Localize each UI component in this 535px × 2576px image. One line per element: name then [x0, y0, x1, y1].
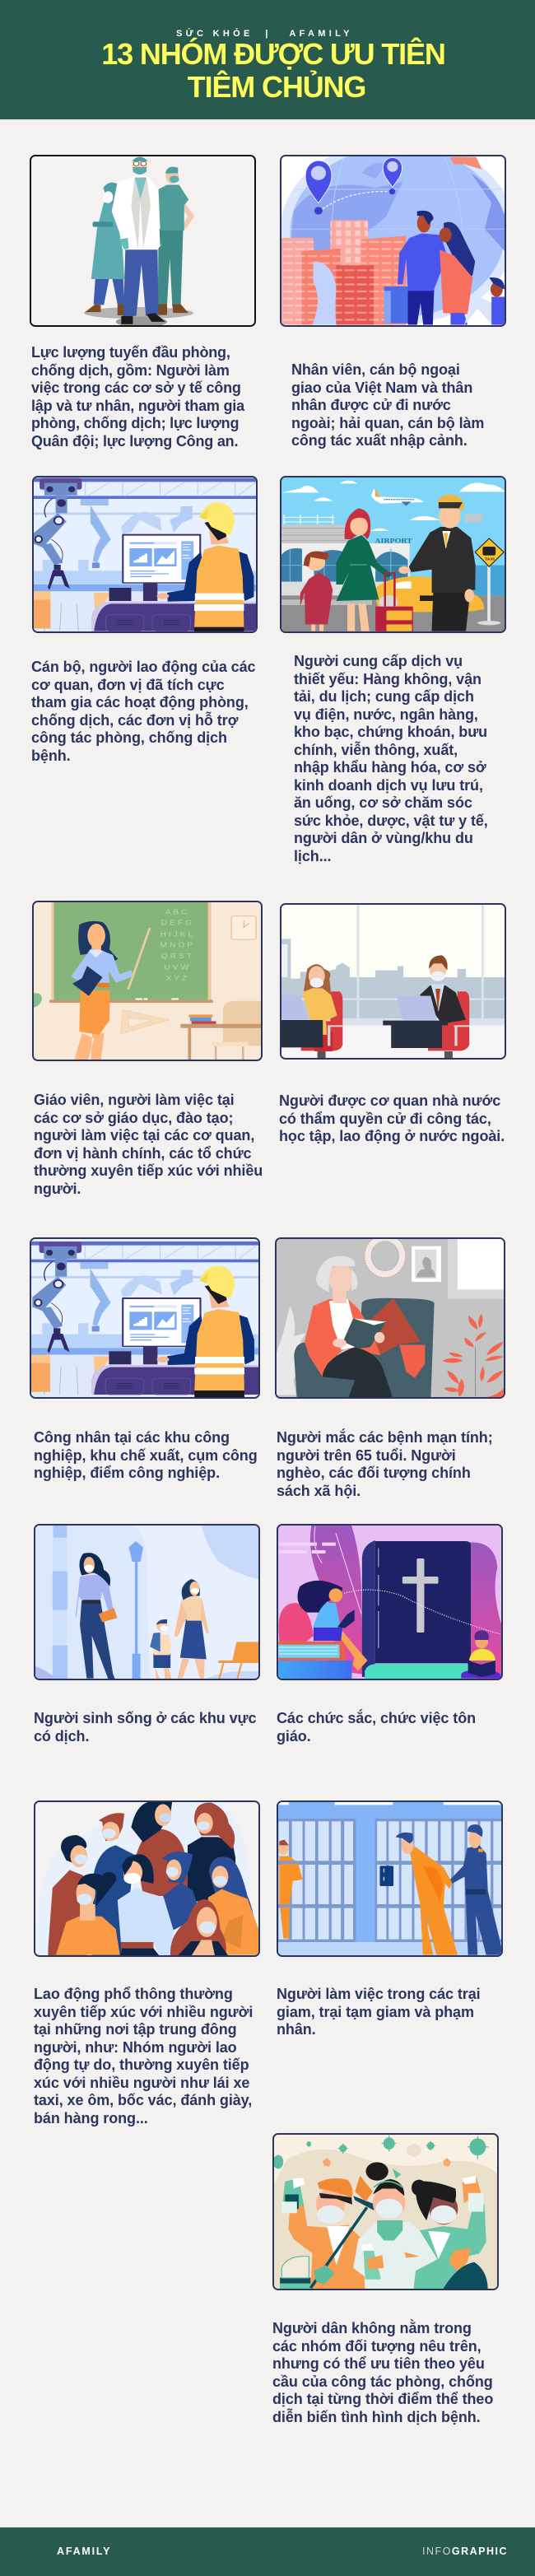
text: officials sent abroad: có thẩm quyền cử đi công tác, — [279, 1110, 491, 1126]
icon: woman holding child's hand — [174, 1579, 209, 1679]
text: essential services: chính, viễn thông, xuất, — [294, 741, 458, 757]
icon: street lamp — [128, 1541, 143, 1679]
text: remaining citizens: nhưng có thể ưu tiên theo yêu — [272, 2355, 485, 2372]
text: chronic illness and elderly: Người mắc các bệnh mạn tính; — [277, 1429, 493, 1446]
panel 3: factory control room — [32, 476, 258, 633]
icon: handcuffed prisoner — [396, 1833, 458, 1955]
icon: coral plant — [442, 1314, 504, 1397]
text: essential services: ăn uống, cơ sở chăm sóc — [294, 794, 472, 811]
icon: location pins — [305, 158, 402, 215]
icon: woman with laptop — [280, 964, 343, 1059]
text: teachers: người. — [34, 1181, 81, 1197]
text: labourers — [34, 1986, 253, 2126]
text: frontline forces: Lực lượng tuyến đầu phòng, — [31, 344, 230, 361]
icon: tall woman with bag — [76, 1553, 117, 1679]
icon: airplane — [371, 488, 424, 505]
icon: prisoner behind bars — [277, 1840, 303, 1939]
text: industrial workers — [34, 1429, 258, 1481]
text: essential services: tải, du lịch; cung cấp dịch — [294, 688, 474, 705]
text: prison staff — [277, 1986, 481, 2038]
title: TIÊM CHỦNG — [188, 70, 365, 104]
icon: red blanket — [370, 1298, 425, 1378]
text: remaining citizens: Người dân không nằm trong — [272, 2320, 472, 2336]
icon: airport building — [280, 515, 506, 633]
icon: cardboard boxes — [27, 591, 111, 628]
text: frontline forces: chống dịch, gồm: Người làm — [31, 362, 230, 379]
text: frontline forces: lập và tư nhân, người tham gia — [31, 397, 244, 413]
text: labourers: tại những nơi tập trung đông — [34, 2021, 237, 2038]
text: diplomats: giao của Việt Nam và thân — [291, 379, 472, 395]
icon: stacked books — [277, 1642, 351, 1679]
text: chronic illness and elderly: sách xã hội. — [277, 1482, 361, 1498]
panel 6: officers working abroad — [280, 903, 506, 1060]
icon: foreground robot arm — [33, 478, 81, 590]
text: remaining citizens: cầu của công tác phòng, chống — [272, 2373, 493, 2389]
icon: elderly woman with book — [305, 1256, 393, 1397]
icon: round mirror — [365, 1235, 406, 1278]
text: chronic illness and elderly: nghèo, các đối tượng chính — [277, 1465, 471, 1481]
text: essential services: kho bạc, chứng khoán, bưu — [294, 724, 487, 740]
text: outbreak areas — [34, 1710, 256, 1744]
icon: boy with backpack — [150, 1619, 171, 1679]
icon: yellow taxi — [374, 576, 484, 612]
icon: desktop monitor with charts — [122, 534, 201, 601]
icon: blackboard: H I J K L — [160, 929, 193, 938]
icon: bench — [218, 1642, 259, 1679]
text: state officers: chống dịch, các đơn vị hỗ trợ — [31, 711, 238, 728]
icon: teacher with pointer — [71, 921, 150, 1060]
panel 12: prison scene — [277, 1800, 503, 1957]
icon: bible with cross — [344, 1540, 501, 1679]
icon: right people in blue — [162, 1852, 259, 1955]
text: frontline forces: việc trong các cơ sở y tế công — [31, 380, 241, 396]
icon: blackboard: X Y Z — [166, 974, 187, 982]
text: state officers: cơ quan, đơn vị đã tích cực — [31, 677, 225, 693]
text: outbreak areas: Người sinh sống ở các khu vực — [34, 1710, 256, 1726]
text: outbreak areas: có dịch. — [34, 1727, 89, 1744]
header band — [0, 0, 535, 119]
icon: front woman with long hair — [170, 1899, 229, 1956]
icon: red suitcase — [375, 573, 413, 631]
icon: blackboard: D E F G — [161, 919, 192, 926]
icon: family with luggage — [384, 211, 505, 324]
text: teachers: đơn vị hành chính, các tổ chức — [34, 1144, 251, 1161]
text: essential services: thiết yếu: Hàng không, vận — [294, 670, 482, 687]
icon: globe — [280, 139, 515, 324]
text: essential services: sức khỏe, dược, vật tư y tế, — [294, 812, 488, 828]
title — [101, 37, 445, 104]
icon: bun woman in orange — [56, 1872, 120, 1955]
icon: armchair — [294, 1298, 435, 1398]
footer: publisher: AFAMILY — [57, 2546, 111, 2557]
text: chronic illness and elderly — [277, 1428, 493, 1498]
panel 7: factory workers — [30, 1237, 260, 1399]
text: industrial workers: nghiệp, khu chế xuất, cụm công — [34, 1447, 258, 1464]
icon: left nurse — [85, 183, 124, 315]
title: 13 NHÓM ĐƯỢC ƯU TIÊN — [101, 37, 445, 71]
text: frontline forces — [31, 344, 245, 450]
icon: airport building: AIRPORT — [374, 538, 412, 544]
icon: purple leaves — [278, 1524, 501, 1679]
icon: green suit worker with bin bag — [412, 2176, 488, 2290]
icon: clouds — [281, 481, 505, 531]
text: essential services: nhập khẩu hàng hóa, cơ sở — [294, 759, 486, 776]
text: state officers: bệnh. — [31, 748, 71, 764]
icon: blackboard: M N O P — [160, 941, 193, 948]
icon: woman in green coat — [336, 508, 393, 631]
icon: doctor in white coat — [112, 157, 165, 324]
text: industrial workers: Công nhân tại các khu công — [34, 1429, 230, 1446]
text: teachers — [34, 1092, 263, 1197]
text: officials sent abroad: học tập, lao động ở nước ngoài. — [279, 1128, 505, 1144]
panel 11: crowd with masks — [34, 1800, 260, 1957]
text: teachers: các cơ sở giáo dục, đào tạo; — [34, 1110, 233, 1126]
text: teachers: Giáo viên, người làm việc tại — [34, 1092, 235, 1108]
text: labourers: người, như: Nhóm người lao — [34, 2038, 237, 2055]
icon: cell bars — [277, 1819, 503, 1957]
icon: framed portrait — [412, 1246, 441, 1282]
icon: background shapes — [34, 1524, 260, 1679]
icon: back row people — [92, 1801, 235, 1956]
icon: guard in blue uniform — [450, 1824, 503, 1955]
icon: broom — [310, 2176, 375, 2288]
icon: ceiling lights — [278, 1802, 501, 1805]
panel 2: diplomats and family — [280, 155, 506, 327]
text: frontline forces: Quân đội; lực lượng Công an. — [31, 433, 238, 450]
icon: child with book — [461, 1630, 501, 1679]
icon: taxi driver — [398, 495, 482, 631]
icon: center woman in white — [118, 1854, 174, 1957]
text: chronic illness and elderly: người trên 65 tuổi. Người — [277, 1447, 456, 1464]
footer: infographic label: INFOGRAPHIC — [422, 2546, 508, 2557]
text: state officers — [31, 659, 255, 764]
icon: wall clock — [231, 916, 256, 939]
icon: taxi sign — [475, 538, 504, 625]
panel 5: teacher at blackboard — [32, 901, 263, 1061]
icon: orange worker with broom — [280, 2178, 365, 2290]
icon: blackboard: A B C — [165, 907, 188, 915]
panel 8: elderly woman reading — [275, 1237, 505, 1399]
text: state officers: tham gia các hoạt động phòng, — [31, 694, 249, 710]
icon: left man in red — [48, 1835, 87, 1956]
icon: worker in safety vest — [156, 502, 254, 634]
text: teachers: người làm việc tại các cơ quan, — [34, 1127, 254, 1144]
icon: virus particles — [273, 2136, 489, 2168]
text: essential services — [294, 653, 488, 864]
text: religious dignitaries: Các chức sắc, chức việc tôn — [277, 1710, 476, 1726]
panel 9: people in outbreak areas — [34, 1524, 260, 1680]
icon: woman reading — [297, 1581, 367, 1671]
icon: cell lock — [379, 1866, 393, 1886]
text: labourers: xuyên tiếp xúc với nhiều người — [34, 2004, 253, 2020]
panel 4: taxi and airport services — [280, 476, 506, 633]
text: essential services: kinh doanh dịch vụ lưu trú, — [294, 777, 483, 794]
text: labourers: xúc với nhiều người như lái xe — [34, 2075, 249, 2091]
icon: blackboard — [49, 901, 213, 1003]
text: officials sent abroad — [279, 1092, 505, 1144]
text: teachers: thường xuyên tiếp xúc với nhiều — [34, 1162, 263, 1179]
panel 13: sanitation workers and viruses — [272, 2133, 499, 2290]
text: remaining citizens — [272, 2319, 493, 2425]
text: prison staff: nhân. — [277, 2021, 316, 2038]
text: diplomats: ngoài; hải quan, cán bộ làm — [291, 415, 484, 431]
icon: desk chair and books — [180, 1001, 263, 1060]
text: diplomats: nhân được cử đi nước — [291, 397, 451, 413]
text: labourers: Lao động phổ thông thường — [34, 1986, 233, 2002]
eyebrow: section and publisher: SỨC KHỎE | AFAMILY — [176, 29, 353, 39]
icon: background robot arms — [81, 499, 193, 568]
footer band — [0, 2527, 535, 2576]
text: frontline forces: phòng, chống dịch; lực lượng — [31, 415, 239, 431]
icon: set square — [120, 1009, 170, 1034]
text: essential services: vụ điện, nước, ngân hàng, — [294, 706, 478, 723]
text: officials sent abroad: Người được cơ quan nhà nước — [279, 1092, 500, 1109]
icon: city buildings — [281, 220, 406, 324]
icon: white leaf plant — [276, 1306, 305, 1395]
text: labourers: taxi, xe ôm, bốc vác, đánh giày, — [34, 2092, 252, 2108]
text: diplomats: Nhân viên, cán bộ ngoại — [291, 361, 460, 378]
text: industrial workers: nghiệp, điểm công nghiệp. — [34, 1465, 220, 1481]
text: state officers: Cán bộ, người lao động của các — [31, 659, 255, 675]
text: religious dignitaries — [277, 1709, 476, 1745]
text: labourers: động tự do, thường xuyên tiếp — [34, 2057, 249, 2073]
text: essential services: Người cung cấp dịch vụ — [294, 653, 463, 669]
icon: blackboard: U V W — [164, 963, 188, 971]
icon: blackboard: Q R S T — [161, 952, 192, 960]
text: religious dignitaries: giáo. — [277, 1727, 311, 1744]
icon: taxi sign: TAXI — [485, 557, 495, 561]
icon: plant leaf — [33, 993, 42, 1008]
panel 10: religious dignitaries — [277, 1524, 503, 1680]
text: diplomats: công tác xuất nhập cảnh. — [291, 432, 468, 449]
text: remaining citizens: diễn biến tình hình dịch bệnh. — [272, 2409, 481, 2425]
text: labourers: bán hàng rong... — [34, 2109, 148, 2126]
icon: woman in white with bottle — [353, 2162, 437, 2290]
text: diplomats — [291, 361, 484, 449]
text: remaining citizens: các nhóm đối tượng nêu trên, — [272, 2338, 482, 2355]
text: essential services: người dân ở vùng/khu du — [294, 830, 473, 846]
icon: window — [448, 1237, 506, 1299]
icon: child in red coat — [300, 551, 333, 631]
text: essential services: lịch... — [294, 848, 331, 864]
panel 1: frontline medical staff — [30, 155, 256, 327]
icon: right nurse — [157, 167, 194, 315]
text: state officers: công tác phòng, chống dịch — [31, 729, 227, 746]
icon: purple control desk — [92, 588, 259, 631]
text: prison staff: Người làm việc trong các trại — [277, 1986, 481, 2002]
text: remaining citizens: dịch tại từng thời điểm thể theo — [272, 2391, 493, 2407]
text: prison staff: giam, trại tạm giam và phạm — [277, 2004, 474, 2020]
icon: man with laptop — [383, 955, 470, 1059]
icon: city skyline through window — [280, 903, 506, 1060]
